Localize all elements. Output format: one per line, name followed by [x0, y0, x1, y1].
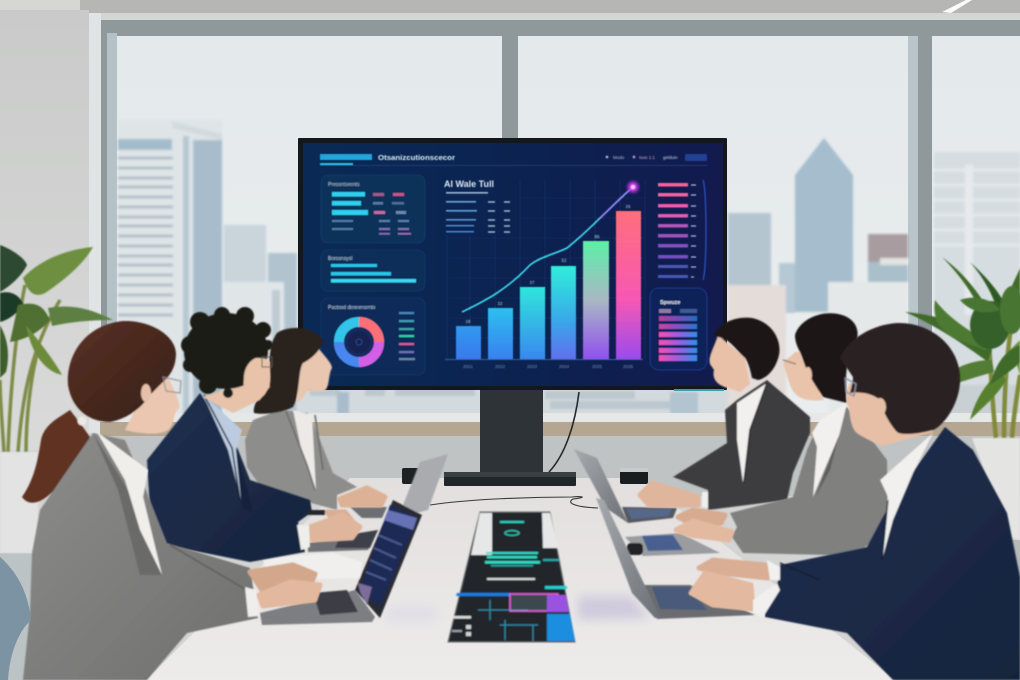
person: man dark grey jacket [640, 318, 810, 510]
conference table [146, 478, 895, 680]
screen chart: grid [447, 180, 645, 359]
plant left [0, 245, 113, 553]
screen panel: donut chart [321, 298, 425, 375]
table reflections [384, 596, 650, 622]
monitor bezel [298, 138, 727, 390]
person: man front right navy jacket [691, 323, 1020, 680]
screen panel: top-left stats: Pressntseonts [328, 182, 360, 188]
bar chart: 2026 [623, 364, 634, 369]
screen panel: right column bars [658, 180, 706, 280]
paper on table [262, 553, 362, 580]
wall display [298, 138, 727, 486]
laptop right far [574, 449, 677, 523]
screen panel: bottom-right rows: Spwuze [660, 300, 680, 306]
bar chart: 2024 [559, 364, 570, 369]
table display [448, 512, 575, 642]
monitor screen [303, 143, 723, 386]
screen header: Ison 1:1 [639, 155, 656, 160]
trend line [462, 179, 641, 312]
screen header [320, 153, 708, 166]
screen panel: middle bars: Borssnaysl [328, 256, 352, 262]
screen panel: top-left stats [321, 175, 425, 243]
bar chart: 2023 [527, 364, 538, 369]
plant right [905, 257, 1020, 540]
laptop left near [260, 500, 422, 625]
table cables and box [402, 468, 648, 508]
laptop left middle [308, 530, 378, 552]
bar chart: 2025 [592, 364, 603, 369]
bar chart: 2022 [495, 364, 506, 369]
laptop right near [596, 498, 755, 619]
icon: pot right [972, 438, 1020, 540]
screen header: gelduin [663, 155, 678, 160]
donut chart [339, 322, 379, 362]
bar chart [445, 204, 643, 369]
laptops right side [574, 449, 755, 619]
window sill and lower wall [100, 413, 1020, 496]
screen chart: title and table: AI Wale Tull [444, 179, 494, 189]
bar chart: 28 [465, 319, 471, 324]
bar chart: 86 [594, 234, 600, 239]
screen panel: donut chart: Pactosd donnenomto [328, 305, 375, 311]
screen panel: bottom-right rows [650, 288, 707, 370]
screen contents [320, 153, 708, 375]
laptops left side [260, 454, 448, 625]
bar chart: 32 [497, 301, 503, 306]
building: right peaked tower [795, 138, 853, 312]
screen header: Otsanizcutionscecor [378, 153, 455, 162]
curly hair [181, 307, 273, 398]
person: man navy jacket [147, 307, 360, 562]
building: left tower [118, 120, 222, 416]
screen panel: middle bars [321, 250, 425, 291]
chair [0, 557, 31, 680]
monitor stand [444, 388, 579, 486]
person: woman far left grey jacket [245, 328, 385, 510]
person: man grey jacket [676, 313, 888, 555]
screen chart: title and table [444, 179, 510, 232]
bar chart: 37 [529, 280, 535, 285]
window with skyline [101, 20, 1020, 423]
skyline strip below monitor [298, 388, 730, 416]
donut legend [399, 312, 415, 360]
laptop right middle [625, 533, 720, 556]
person: woman front left [22, 321, 320, 680]
laptop left far [350, 454, 448, 518]
bar chart: 26 [625, 204, 631, 209]
icon: pot left [0, 452, 38, 553]
bar chart: 52 [561, 258, 567, 263]
screen header: Modo [613, 155, 625, 160]
bar chart: 2021 [463, 364, 474, 369]
